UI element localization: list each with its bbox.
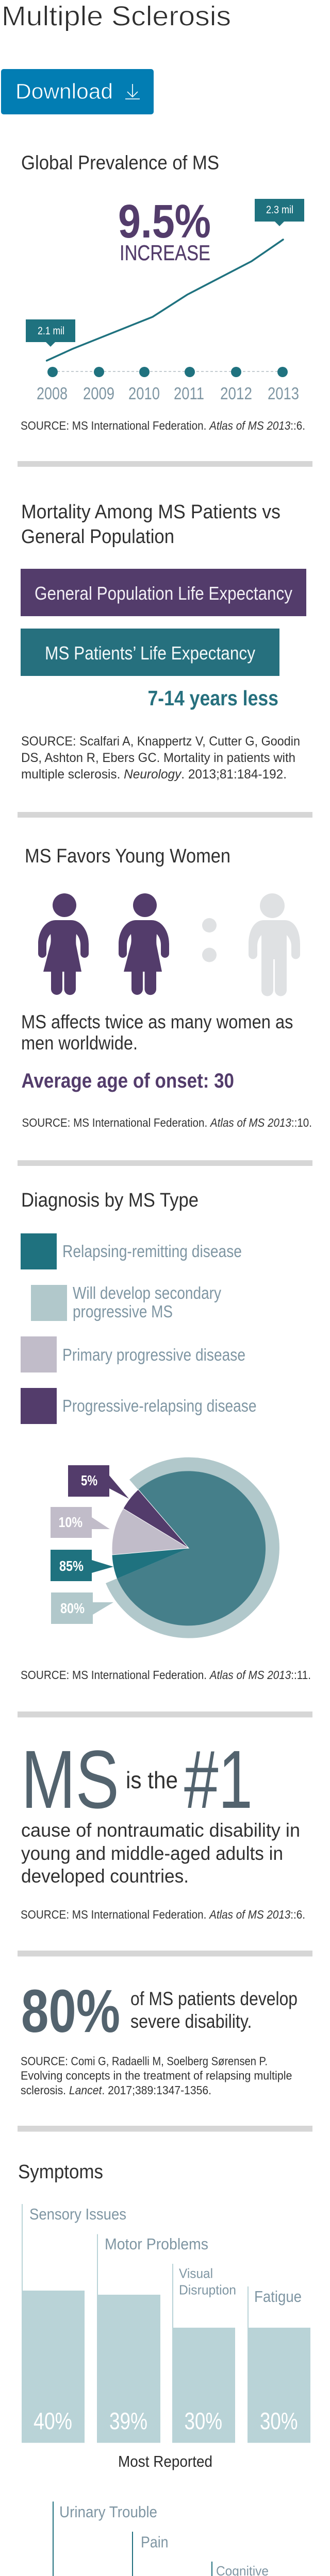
source: SOURCE: MS International Federation. Atlas of MS 2013::10. <box>22 1116 312 1129</box>
source: SOURCE: MS International Federation. Atlas of MS 2013::6. <box>21 1908 305 1921</box>
text block <box>130 1988 298 2032</box>
source: sclerosis. Lancet. 2017;389:1347-1356. <box>21 2083 211 2097</box>
callout: 85% <box>51 1550 113 1581</box>
callout: years less: 7-14 years less <box>147 686 278 710</box>
panel: number one cause <box>21 1733 305 1921</box>
source <box>21 734 300 782</box>
callout: 2.3 mil <box>255 199 304 226</box>
heading <box>21 501 280 548</box>
icon: ratio colon <box>202 918 217 962</box>
heading: Global Prevalence of MS <box>21 152 219 174</box>
bar: visual disruption <box>172 2264 236 2443</box>
legend: secondary progressive: progressive MS <box>73 1302 173 1321</box>
bar: fatigue: Fatigue <box>254 2287 302 2306</box>
icon: man <box>249 893 300 996</box>
pie chart <box>106 1458 279 1638</box>
bar: pain: Pain <box>141 2533 168 2551</box>
heading: General Population <box>21 526 174 548</box>
legend: progressive-relapsing <box>21 1388 257 1424</box>
text block: MS affects twice as many women as <box>21 1011 293 1032</box>
bar: general population: General Population Life Expectancy <box>35 583 292 604</box>
bar: general population <box>21 569 306 616</box>
big statement: is the <box>126 1767 178 1793</box>
callout: 2.3 mil: 2.3 mil <box>266 204 293 216</box>
year labels: 2010 <box>128 384 160 403</box>
text block <box>21 1820 300 1887</box>
panel: young women <box>21 845 312 1129</box>
panel: global prevalence <box>21 152 305 432</box>
callout: 85%: 85% <box>59 1558 84 1574</box>
heading: MS Favors Young Women <box>25 845 230 867</box>
heading: Symptoms <box>18 2161 103 2183</box>
callout: 5%: 5% <box>81 1472 97 1488</box>
text block: cause of nontraumatic disability in <box>21 1820 300 1841</box>
source <box>21 2055 292 2097</box>
panel: diagnosis <box>21 1190 311 1682</box>
text block: developed countries. <box>21 1866 189 1887</box>
callout: 2.1 mil: 2.1 mil <box>38 325 64 337</box>
source: SOURCE: MS International Federation. Atlas of MS 2013::6. <box>21 419 305 432</box>
title: Multiple Sclerosis <box>2 1 231 32</box>
bar: motor problems: Motor Problems <box>105 2235 208 2253</box>
big stat <box>118 195 211 265</box>
icon: woman 2 <box>119 893 169 995</box>
bar chart: most reported <box>22 2204 310 2443</box>
text block: of MS patients develop <box>130 1988 298 2009</box>
callout: 80% <box>51 1592 113 1624</box>
bar chart: least reported <box>53 2502 278 2576</box>
big stat: 80% <box>21 1977 120 2045</box>
download button <box>1 69 154 114</box>
bar: sensory issues <box>22 2204 126 2443</box>
big stat: 9.5% <box>118 195 211 248</box>
legend: secondary progressive <box>31 1283 221 1321</box>
callout: 10%: 10% <box>59 1514 82 1530</box>
timeline dots <box>47 367 288 377</box>
callout: 2.1 mil <box>26 319 75 347</box>
source: Evolving concepts in the treatment of relapsing multiple <box>21 2069 292 2082</box>
text block: men worldwide. <box>21 1032 138 1054</box>
icon: download arrow <box>125 84 140 99</box>
big statement <box>21 1733 253 1825</box>
bar: fatigue <box>248 2286 310 2443</box>
bar: MS patients <box>21 629 279 676</box>
year labels: 2012 <box>220 384 252 403</box>
text block: young and middle-aged adults in <box>21 1843 283 1864</box>
big statement: #1 <box>184 1733 253 1825</box>
average age: Average age of onset: 30 <box>22 1070 234 1092</box>
panel: symptoms <box>18 2161 311 2576</box>
panel: mortality <box>21 501 306 782</box>
heading: Diagnosis by MS Type <box>21 1190 199 1211</box>
bar: urinary trouble: Urinary Trouble <box>59 2503 157 2521</box>
legend: progressive-relapsing: Progressive-relapsing disease <box>62 1396 257 1415</box>
bar: visual disruption: Disruption <box>179 2282 236 2298</box>
bar: sensory issues: 40% <box>34 2408 72 2434</box>
year labels: 2009 <box>83 384 114 403</box>
heading: Mortality Among MS Patients vs <box>21 501 280 523</box>
year labels: 2013 <box>268 384 299 403</box>
year labels: 2008 <box>37 384 68 403</box>
legend: primary progressive <box>21 1336 245 1372</box>
text block <box>21 1011 293 1054</box>
bar: motor problems: 39% <box>109 2408 147 2434</box>
year labels <box>37 384 299 403</box>
bar: visual disruption: Visual <box>179 2266 213 2281</box>
bar: motor problems <box>97 2234 208 2443</box>
bar: MS patients: MS Patients’ Life Expectancy <box>45 642 255 664</box>
legend: secondary progressive: Will develop secondary <box>73 1283 221 1302</box>
bar: visual disruption: 30% <box>185 2408 222 2434</box>
panel: severe disability <box>21 1977 298 2097</box>
callout: 10% <box>51 1507 110 1538</box>
line chart <box>47 240 283 361</box>
callout: 5% <box>68 1465 129 1499</box>
source: DS, Ashton R, Ebers GC. Mortality in patients with <box>21 751 295 765</box>
source: SOURCE: Comi G, Radaelli M, Soelberg Sørensen P. <box>21 2055 268 2068</box>
source: SOURCE: Scalfari A, Knappertz V, Cutter G, Goodin <box>21 734 300 749</box>
bar: sensory issues: Sensory Issues <box>29 2205 126 2223</box>
legend: primary progressive: Primary progressive disease <box>62 1345 245 1364</box>
year labels: 2011 <box>174 384 204 403</box>
callout: 80%: 80% <box>60 1600 85 1616</box>
icon: woman 1 <box>38 893 89 995</box>
source: SOURCE: MS International Federation. Atlas of MS 2013::11. <box>21 1668 311 1682</box>
legend: relapsing-remitting <box>21 1233 242 1269</box>
bar: fatigue: 30% <box>260 2408 298 2434</box>
big stat: INCREASE <box>120 241 210 265</box>
download button: Download <box>15 79 113 103</box>
text block: severe disability. <box>130 2011 252 2032</box>
big statement: MS <box>21 1733 119 1825</box>
legend: relapsing-remitting: Relapsing-remitting disease <box>62 1242 242 1261</box>
caption: most reported: Most Reported <box>118 2452 212 2470</box>
source: multiple sclerosis. Neurology. 2013;81:184-192. <box>21 767 287 782</box>
